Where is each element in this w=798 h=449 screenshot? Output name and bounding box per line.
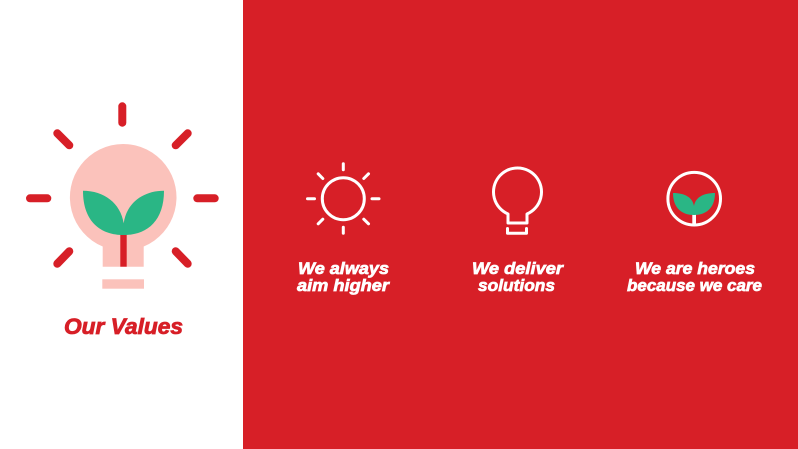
bulb base	[102, 279, 144, 289]
text: We always aim higher: We always	[298, 259, 389, 278]
panel: red right	[243, 0, 798, 449]
icon: sun	[308, 164, 379, 233]
text: We deliver solutions: We deliver	[472, 259, 564, 278]
text: We always aim higher: aim higher	[297, 276, 390, 295]
icon: plant in circle	[668, 172, 720, 225]
text: We are heroes because we care	[627, 259, 762, 295]
panel: white left	[0, 0, 243, 449]
text: We deliver solutions	[472, 259, 564, 295]
text: We deliver solutions: solutions	[478, 276, 555, 295]
light rays	[30, 106, 215, 264]
icon: outlined light bulb	[493, 168, 542, 233]
plant leaves	[83, 191, 164, 235]
icon: main light bulb with plant	[30, 106, 215, 289]
bulb body	[70, 144, 176, 267]
text: We are heroes because we care: We are heroes	[635, 259, 755, 278]
plant stem	[120, 234, 127, 267]
heading: Our Values: Our Values	[64, 314, 183, 339]
text: We are heroes because we care: because we care	[627, 276, 762, 295]
text: We always aim higher	[297, 259, 390, 295]
